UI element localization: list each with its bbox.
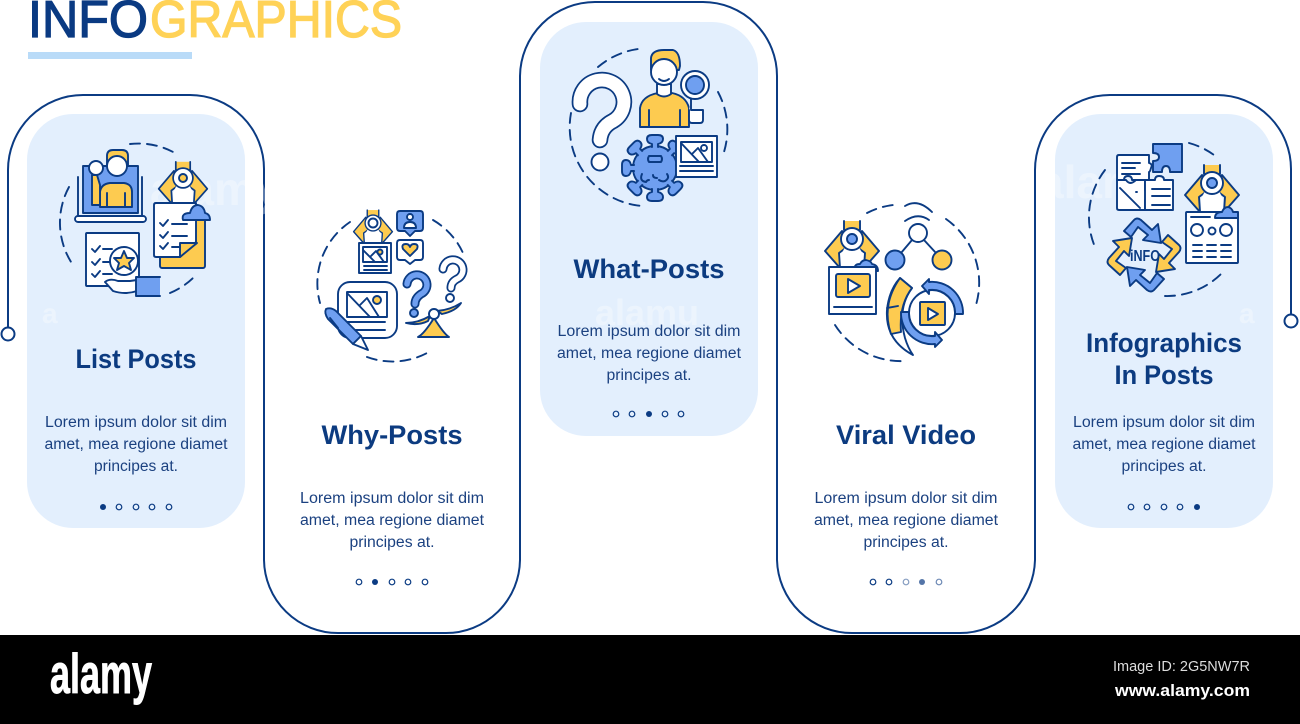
virus: [622, 135, 688, 201]
heading: why-posts: Why-Posts: [322, 420, 462, 450]
pagination: step 2: [356, 579, 428, 585]
watermarks: a: [42, 298, 58, 329]
heart bubble: [397, 240, 423, 264]
text: infographics in posts body: [1072, 414, 1256, 475]
watermarks: a: [1239, 298, 1255, 329]
heading: viral video: Viral Video: [836, 420, 976, 450]
question marks on a seesaw: [406, 260, 463, 337]
text: what-posts body: Lorem ipsum dolor sit dim: [558, 323, 740, 340]
footer bar: Image ID: 2G5NW7R: [1113, 659, 1250, 675]
profile bubble: [397, 211, 423, 236]
recycle arrows around info: [1108, 218, 1180, 292]
puzzle: [1117, 144, 1182, 210]
robot arm with video card: [825, 221, 879, 314]
heading: infographics in posts: In Posts: [1114, 360, 1214, 390]
panel: list posts background: [27, 114, 245, 528]
icon: infographics in posts: [1089, 143, 1239, 296]
title: [28, 0, 402, 59]
network nodes with signal: [886, 203, 952, 270]
icon: why-posts: [317, 210, 463, 362]
document with star: [86, 233, 160, 296]
heading: infographics in posts: Infographics: [1086, 328, 1242, 358]
panel: infographics in posts background: [1055, 114, 1273, 528]
clipboard with robot arm: [154, 162, 210, 268]
panel: what-posts background: [540, 22, 758, 436]
icon: viral video: [825, 203, 979, 361]
text: what-posts body: amet, mea regione diamet: [557, 345, 742, 362]
heading: list posts: List Posts: [76, 344, 196, 374]
footer bar: alamy: [50, 642, 152, 705]
rotating video: [901, 279, 963, 347]
text: viral video body: [814, 490, 999, 551]
icon: list posts: [60, 144, 210, 296]
text: list posts body: principes at.: [94, 458, 178, 475]
person with magnifier: [640, 50, 709, 127]
text: infographics in posts body: principes at.: [1122, 458, 1206, 475]
text: viral video body: Lorem ipsum dolor sit dim: [814, 490, 998, 507]
question mark: [580, 80, 624, 170]
text: what-posts body: principes at.: [606, 367, 692, 384]
robot arm with chart card: [1185, 165, 1239, 263]
text: list posts body: [44, 414, 228, 475]
icon: what-posts: [570, 49, 727, 206]
robot arm with picture card: [354, 210, 392, 273]
text: why-posts body: [300, 490, 485, 551]
heading: what-posts: What-Posts: [574, 254, 724, 284]
text: infographics in posts body: Lorem ipsum dolor sit dim: [1073, 414, 1255, 431]
watermarks: alamy: [150, 163, 281, 215]
text: why-posts body: amet, mea regione diamet: [300, 512, 485, 529]
text: why-posts body: principes at.: [350, 534, 434, 551]
pagination: step 3: [613, 411, 684, 417]
watermarks: alam: [1038, 156, 1143, 208]
text: viral video body: amet, mea regione diamet: [814, 512, 999, 529]
text: list posts body: amet, mea regione diamet: [44, 436, 228, 453]
text: what-posts body: [557, 323, 742, 384]
text: infographics in posts body: amet, mea regione diamet: [1072, 436, 1256, 453]
footer bar: [0, 635, 1300, 724]
photo post with pen: [325, 282, 397, 350]
recycle arrows around info: iNFO: [1130, 248, 1160, 265]
picture card: [676, 136, 717, 177]
pagination: step 5: [1128, 504, 1200, 510]
watermarks: [42, 156, 1255, 333]
footer bar: www.alamy.com: [1114, 681, 1250, 700]
growth crescent: [887, 278, 913, 355]
text: list posts body: Lorem ipsum dolor sit dim: [45, 414, 227, 431]
laptop with presenter: [75, 150, 146, 222]
text: viral video body: principes at.: [864, 534, 948, 551]
watermarks: alamu: [595, 292, 699, 333]
pagination: step 1: [100, 504, 172, 510]
heading: infographics in posts: [1086, 328, 1242, 390]
text: why-posts body: Lorem ipsum dolor sit dim: [300, 490, 484, 507]
pagination: step 4: [870, 579, 942, 585]
